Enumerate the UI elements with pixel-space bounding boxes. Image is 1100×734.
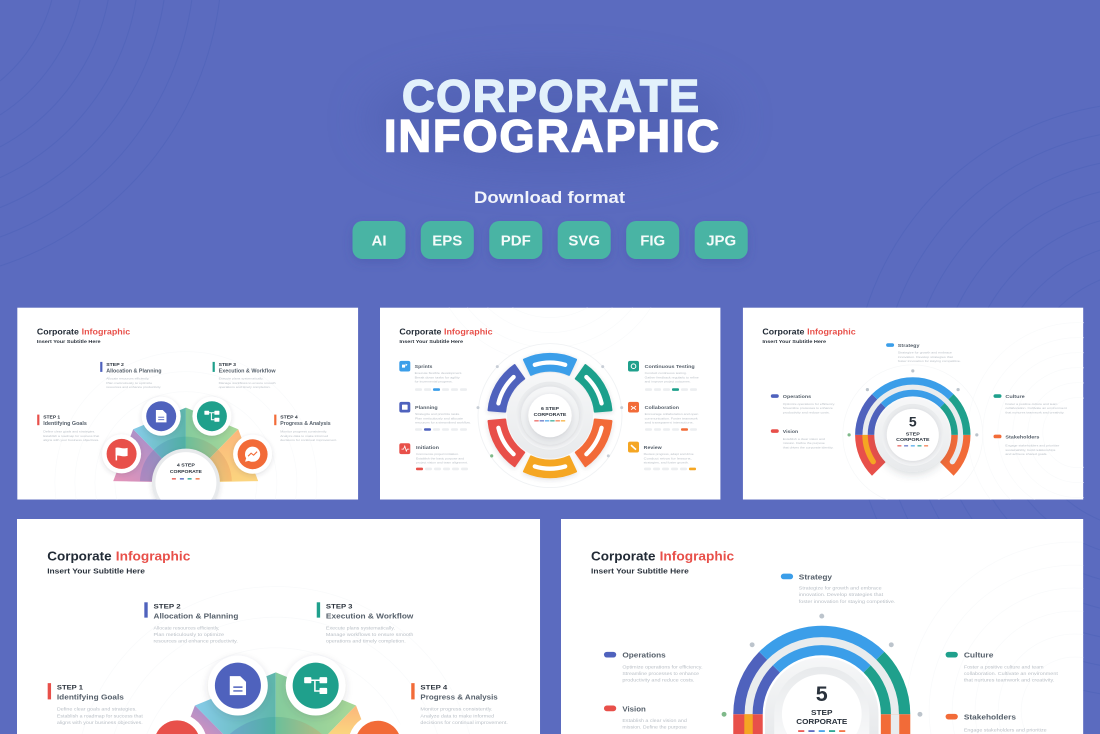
ring segments	[484, 354, 616, 477]
step 4 text: decisions for continual improvement.	[280, 438, 337, 442]
vision item: that drives the corporate identity.	[783, 446, 834, 450]
icon: flag (cropped)	[149, 714, 206, 734]
step 3 text: Manage workflows to ensure smooth	[326, 632, 414, 637]
step 4 text: decisions for continual improvement.	[420, 720, 508, 725]
operations item	[604, 651, 703, 682]
heading	[762, 328, 856, 343]
culture item: collaboration. Cultivate an environment	[964, 671, 1059, 676]
step 4 text: STEP 4	[280, 415, 298, 420]
format badges: PDF	[501, 232, 531, 250]
heading: Corporate	[47, 548, 112, 563]
main title: CORPORATE	[402, 70, 699, 122]
step 2 text	[144, 602, 239, 644]
icon: progress chart	[233, 435, 272, 474]
culture item: collaboration. Cultivate an environment	[1005, 406, 1067, 410]
step 1 text: Define clear goals and strategies.	[57, 707, 137, 712]
step 1 text: Establish a roadmap for success that	[43, 434, 99, 438]
stakeholders item: Stakeholders	[964, 713, 1016, 722]
format badges	[352, 221, 748, 259]
arc center hub: CORPORATE	[896, 437, 929, 442]
initiation item: Commence project initiation.	[416, 452, 459, 456]
step 1 text: aligns with your business objectives.	[43, 438, 99, 442]
step 2 text: Allocate resources efficiently,	[106, 377, 149, 381]
culture item: that nurtures teamwork and creativity.	[1005, 411, 1065, 415]
step 4 text: STEP 4	[420, 684, 448, 691]
review item: Review	[644, 445, 662, 450]
dots around arc	[722, 614, 922, 717]
ring center hub	[507, 373, 593, 459]
vision item: Establish a clear vision and	[622, 718, 687, 723]
heading: Insert Your Subtitle Here	[37, 339, 101, 344]
center hub	[150, 448, 222, 500]
lower arc colors	[733, 714, 910, 734]
icon: flag	[102, 434, 141, 473]
step 3 text: Execution & Workflow	[219, 368, 276, 374]
operations item: productivity and reduce costs.	[622, 677, 694, 682]
vision item: Establish a clear vision and	[783, 437, 825, 441]
format badges: JPG	[706, 232, 736, 250]
heading: Infographic	[660, 548, 734, 563]
operations item	[771, 394, 835, 414]
operations item: Operations	[783, 394, 811, 400]
step 2 text: resources and enhance productivity.	[154, 639, 238, 644]
heading: Infographic	[116, 548, 190, 563]
step label: STEP	[811, 710, 833, 717]
heading: Infographic	[444, 327, 493, 337]
collaboration item: communication. Foster teamwork	[645, 416, 698, 420]
step 4 text: Analyze data to make informed	[420, 713, 495, 718]
format badges: EPS	[432, 232, 462, 250]
fan shape	[184, 672, 367, 734]
step 2 text: resources and enhance productivity.	[106, 385, 161, 389]
strategy item	[781, 573, 895, 604]
step 1 text: Identifying Goals	[57, 692, 124, 701]
initiation item: Initiation	[416, 445, 439, 450]
step 3 text: Execute plans systematically.	[326, 625, 395, 630]
center hub: CORPORATE	[170, 469, 202, 474]
icon: document	[208, 656, 268, 716]
review item	[628, 442, 696, 470]
strategy item: Strategy	[898, 343, 920, 349]
panel: 5 step arc infographic small	[742, 308, 1084, 500]
stakeholders item: sustainability, build relationships	[1005, 448, 1056, 452]
step 3 text: STEP 3	[219, 362, 237, 367]
step 3 text: operations and timely completion.	[219, 385, 271, 389]
heading: Insert Your Subtitle Here	[399, 339, 464, 344]
culture item: Culture	[1005, 394, 1025, 400]
ring center hub: CORPORATE	[534, 412, 566, 417]
operations item: Streamline processes to enhance	[622, 671, 700, 676]
step 1 text: aligns with your business objectives.	[57, 720, 143, 725]
continuous testing item	[628, 361, 699, 391]
strategy item: innovation. Develop strategies that	[898, 355, 953, 359]
sprints item	[399, 361, 467, 391]
step 3 text	[317, 602, 414, 644]
operations item: productivity and reduce costs.	[783, 411, 830, 415]
fan shape	[113, 408, 258, 482]
review item: Review progress, adapt and drive	[644, 452, 694, 456]
vision item: mission. Define the purpose	[783, 441, 825, 445]
step 4 text	[411, 683, 508, 725]
strategy item: Strategize for growth and embrace	[799, 586, 882, 591]
step 1 text: Identifying Goals	[43, 421, 87, 427]
heading: Corporate	[37, 327, 79, 337]
strategy item	[886, 343, 961, 363]
sprints item: Sprints	[415, 364, 433, 369]
planning item: resources for a streamlined workflow.	[415, 421, 471, 425]
sprints item: Execute flexible development.	[415, 371, 463, 375]
operations item: Optimize operations for efficiency.	[783, 402, 835, 406]
operations item: Optimize operations for efficiency.	[622, 664, 703, 669]
continuous testing item: Conduct continuous testing.	[645, 371, 687, 375]
heading: Insert Your Subtitle Here	[47, 569, 145, 576]
icon: workflow	[286, 656, 346, 716]
step 2 text: Allocate resources efficiently,	[154, 625, 219, 630]
sprints item: for incremental progress.	[415, 380, 453, 384]
step 1 text	[48, 683, 144, 725]
heading: Insert Your Subtitle Here	[591, 569, 689, 576]
collaboration item: and transparent interactions.	[645, 421, 694, 425]
heading	[400, 328, 492, 343]
vision item	[771, 429, 834, 450]
icon: document	[142, 397, 181, 436]
number five: 5	[816, 682, 828, 706]
main title	[384, 70, 719, 162]
ring center hub: 6 STEP	[541, 406, 559, 411]
step 3 text: Execute plans systematically.	[219, 377, 264, 381]
review item: strategies, and foster growth.	[644, 461, 689, 465]
vision item: Vision	[783, 429, 798, 435]
stakeholders item: Engage stakeholders and prioritize	[1005, 444, 1060, 448]
step 3 text: Execution & Workflow	[326, 611, 413, 620]
step 2 text: Plan meticulously to optimize	[106, 381, 153, 385]
sprints item: Break down tasks for agility	[415, 375, 460, 379]
arc center hub	[765, 658, 879, 734]
heading: Infographic	[807, 327, 856, 337]
step label: CORPORATE	[796, 719, 848, 726]
heading: Infographic	[82, 327, 130, 337]
main title: INFOGRAPHIC	[384, 110, 719, 162]
vision item	[604, 704, 687, 730]
step 4 text	[274, 415, 337, 442]
step 3 text: STEP 3	[326, 603, 353, 610]
step 1 text: Establish a roadmap for success that	[57, 713, 144, 718]
heading	[48, 551, 190, 574]
arc center hub	[876, 398, 950, 472]
culture item: that nurtures teamwork and creativity.	[964, 677, 1054, 682]
stakeholders item: Engage stakeholders and prioritize	[964, 727, 1047, 732]
continuous testing item: Continuous Testing	[645, 364, 695, 369]
heading: Corporate	[762, 327, 805, 337]
initiation item: Establish the basic purpose and	[416, 456, 464, 460]
heading	[591, 548, 734, 576]
culture item: Foster a positive culture and team	[964, 664, 1044, 669]
step 2 text	[100, 362, 161, 389]
collaboration item: Encourage collaboration and open	[645, 412, 699, 416]
culture item: Foster a positive culture and team	[1005, 402, 1058, 406]
strategy item: Strategize for growth and embrace	[898, 351, 952, 355]
step 2 text: STEP 2	[106, 362, 125, 367]
step 4 text: Monitor progress consistently.	[420, 707, 493, 712]
icon: progress chart (cropped)	[350, 714, 406, 734]
download format label: Download format	[474, 188, 625, 207]
step 1 text: STEP 1	[57, 684, 83, 691]
upper arc bands	[859, 381, 967, 435]
stakeholders item: and achieve shared goals.	[1005, 452, 1048, 456]
step 1 text: STEP 1	[43, 415, 61, 420]
step 2 text: STEP 2	[154, 603, 181, 610]
strategy item: innovation. Develop strategies that	[799, 592, 884, 597]
strategy item: Strategy	[799, 573, 833, 582]
format badges: SVG	[568, 232, 600, 250]
step 3 text	[213, 362, 276, 389]
center hub: 4 STEP	[177, 463, 195, 468]
arc chart	[843, 365, 983, 505]
step 2 text: Allocation & Planning	[106, 368, 161, 374]
culture item	[994, 394, 1067, 414]
lower arc ends	[865, 435, 961, 469]
step 4 text: Analyze data to make informed	[280, 434, 329, 438]
stakeholders item	[994, 434, 1060, 456]
step 3 text: Manage workflows to ensure smooth	[219, 381, 276, 385]
step 2 text: Allocation & Planning	[154, 611, 239, 620]
step 2 text: Plan meticulously to optimize	[154, 632, 225, 637]
collaboration item	[628, 402, 699, 431]
step 1 text	[37, 415, 99, 442]
review item: Conduct retros for lessons,	[644, 456, 692, 460]
strategy item: foster innovation for staying competitive.	[799, 599, 895, 604]
culture item	[946, 651, 1059, 682]
planning item: Plan meticulously and allocate	[415, 416, 463, 420]
panel: 4 step infographic small	[17, 308, 358, 500]
step label	[796, 710, 848, 732]
stakeholders item	[946, 713, 1047, 732]
step 4 text: Monitor progress consistently.	[280, 430, 327, 434]
heading: Insert Your Subtitle Here	[762, 339, 827, 344]
collaboration item: Collaboration	[645, 405, 679, 410]
step 4 text: Progress & Analysis	[420, 692, 498, 701]
ring chart	[476, 344, 623, 488]
heading	[37, 328, 130, 343]
planning item: Planning	[415, 405, 438, 410]
icon: workflow	[192, 397, 231, 436]
culture item: Culture	[964, 651, 993, 660]
panel: 5 step arc infographic large	[561, 519, 1083, 734]
step 1 text: Define clear goals and strategies.	[43, 430, 95, 434]
heading: Corporate	[591, 548, 655, 563]
initiation item: project vision and team alignment.	[416, 461, 468, 465]
planning item	[399, 402, 471, 431]
vision item: Vision	[622, 704, 646, 713]
panel: 4 step infographic large	[17, 519, 540, 734]
step 3 text: operations and timely completion.	[326, 639, 406, 644]
arc center hub: 5	[909, 413, 917, 429]
stakeholders item: Stakeholders	[1005, 434, 1040, 440]
operations item: Operations	[622, 651, 666, 660]
strategy item: foster innovation for staying competitive.	[898, 359, 961, 363]
heading: Corporate	[399, 327, 442, 337]
planning item: Strategize and prioritize tasks.	[415, 412, 460, 416]
initiation item	[399, 443, 468, 470]
arc bands	[739, 631, 905, 714]
format badges: AI	[372, 232, 386, 250]
format badges: FIG	[640, 232, 665, 250]
arc center hub: STEP	[906, 431, 920, 436]
operations item: Streamline processes to enhance	[783, 406, 833, 410]
vision item: mission. Define the purpose	[622, 725, 687, 730]
continuous testing item: Gather feedback regularly to refine	[645, 375, 699, 379]
panel: 6 step ring infographic	[380, 308, 720, 500]
continuous testing item: and improve project outcomes.	[645, 380, 691, 384]
step 4 text: Progress & Analysis	[280, 421, 331, 427]
